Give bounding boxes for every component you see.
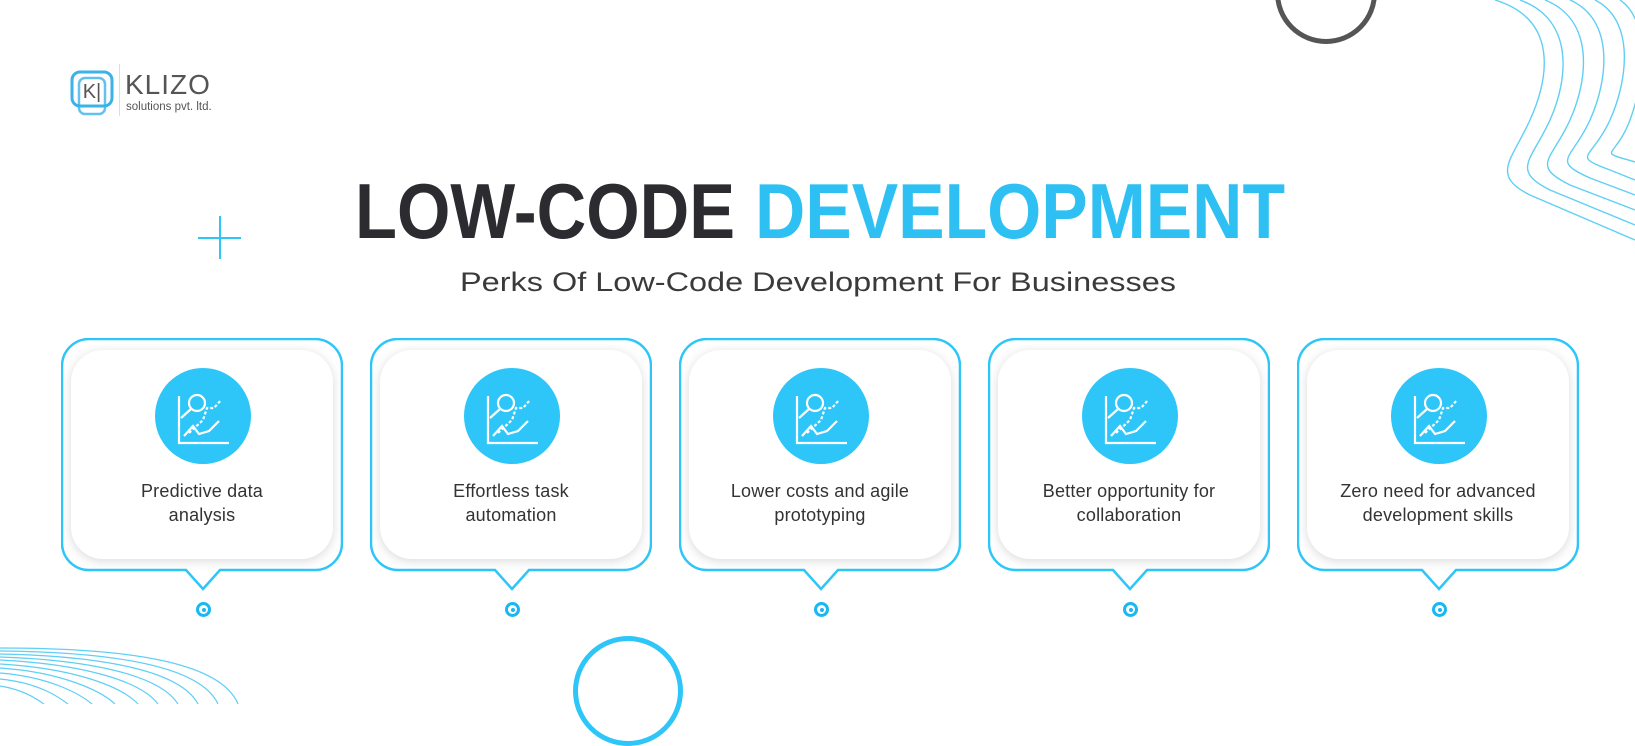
card 2: Effortless task (453, 481, 569, 501)
card 5 (1297, 338, 1579, 617)
logo (70, 64, 212, 116)
text: logo name: KLIZO (125, 69, 211, 100)
card 3: prototyping (774, 505, 866, 525)
icon: logo mark (70, 70, 114, 116)
card 1: analysis (169, 505, 235, 525)
card 4: Better opportunity for (1043, 481, 1215, 501)
card 4 (988, 338, 1270, 617)
card 2: automation (465, 505, 557, 525)
card 3 (679, 338, 961, 617)
subtitle: Perks Of Low-Code Development For Businesses (460, 267, 1176, 297)
card 2 (370, 338, 652, 617)
card 4: collaboration (1077, 505, 1181, 525)
card 1: Predictive data (141, 481, 263, 501)
card 5: development skills (1363, 505, 1513, 525)
card 1 (61, 338, 343, 617)
decoration: plus sign (198, 216, 241, 259)
icon: logo mark: K| (83, 81, 101, 103)
card 5: Zero need for advanced (1340, 481, 1536, 501)
logo: solutions pvt. ltd. (126, 101, 212, 113)
card 3: Lower costs and agile (731, 481, 909, 501)
decoration: top gray circle (1275, 0, 1377, 44)
title (355, 172, 1285, 252)
decoration: bottom blue circle (573, 636, 683, 746)
